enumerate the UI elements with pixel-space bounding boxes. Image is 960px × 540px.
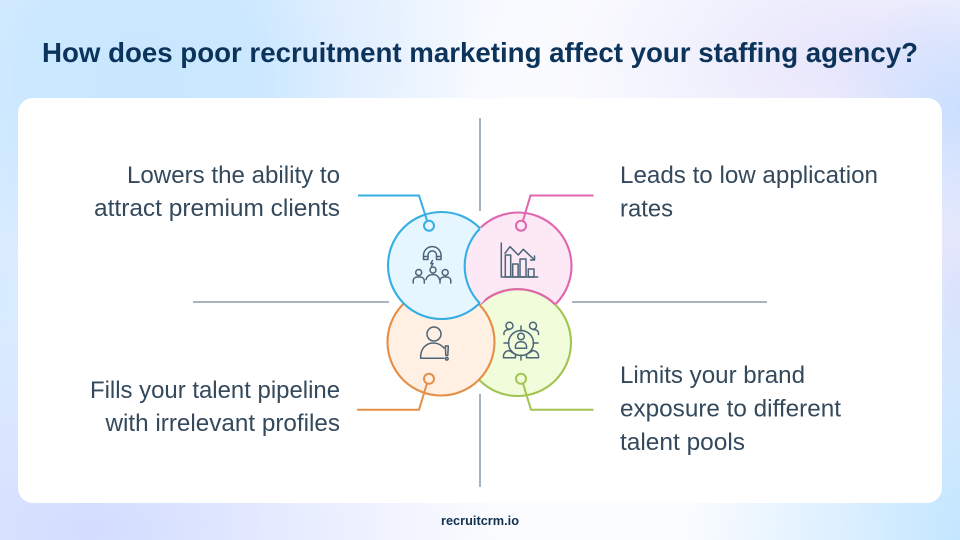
text: limited brand exposure: talent pools: [620, 429, 745, 456]
circle: blue segment: [388, 212, 495, 319]
title: How does poor recruitment marketing affect your staffing agency?: [42, 37, 918, 68]
arc: pink edge over green: [480, 289, 555, 304]
icon: declining bar chart: [501, 243, 538, 277]
circle: orange segment: [388, 288, 494, 396]
icon: magnet attracting people: [413, 247, 451, 283]
icon: people in target: [503, 322, 539, 360]
circle: pink segment: [464, 212, 572, 320]
text: low application rates: Leads to low application: [620, 162, 878, 189]
lens: pink over blue: [466, 228, 496, 304]
text: lowers ability to attract clients: [94, 162, 340, 222]
text: lowers ability to attract clients: Lowers the ability to: [127, 162, 340, 189]
circle: green segment: [464, 289, 571, 396]
diagram: four overlapping circles: [388, 212, 572, 396]
arc: blue edge over pink: [465, 228, 480, 304]
text: irrelevant profiles: [90, 377, 340, 437]
leader: orange: [357, 374, 434, 410]
text: low application rates: rates: [620, 196, 673, 222]
text: low application rates: [620, 162, 878, 222]
text: lowers ability to attract clients: attract premium clients: [94, 195, 340, 222]
text: limited brand exposure: exposure to different: [620, 396, 841, 422]
leader: blue: [358, 196, 434, 231]
icon: person with exclamation mark: [421, 327, 448, 360]
leader: pink: [516, 196, 594, 231]
footer brand: recruitcrm.io: [441, 514, 519, 528]
text: limited brand exposure: [620, 362, 841, 456]
leader: green: [516, 374, 594, 410]
text: limited brand exposure: Limits your brand: [620, 362, 805, 389]
text: irrelevant profiles: with irrelevant profiles: [104, 410, 340, 437]
panel: white card: [18, 98, 942, 503]
text: irrelevant profiles: Fills your talent pipeline: [90, 377, 340, 404]
